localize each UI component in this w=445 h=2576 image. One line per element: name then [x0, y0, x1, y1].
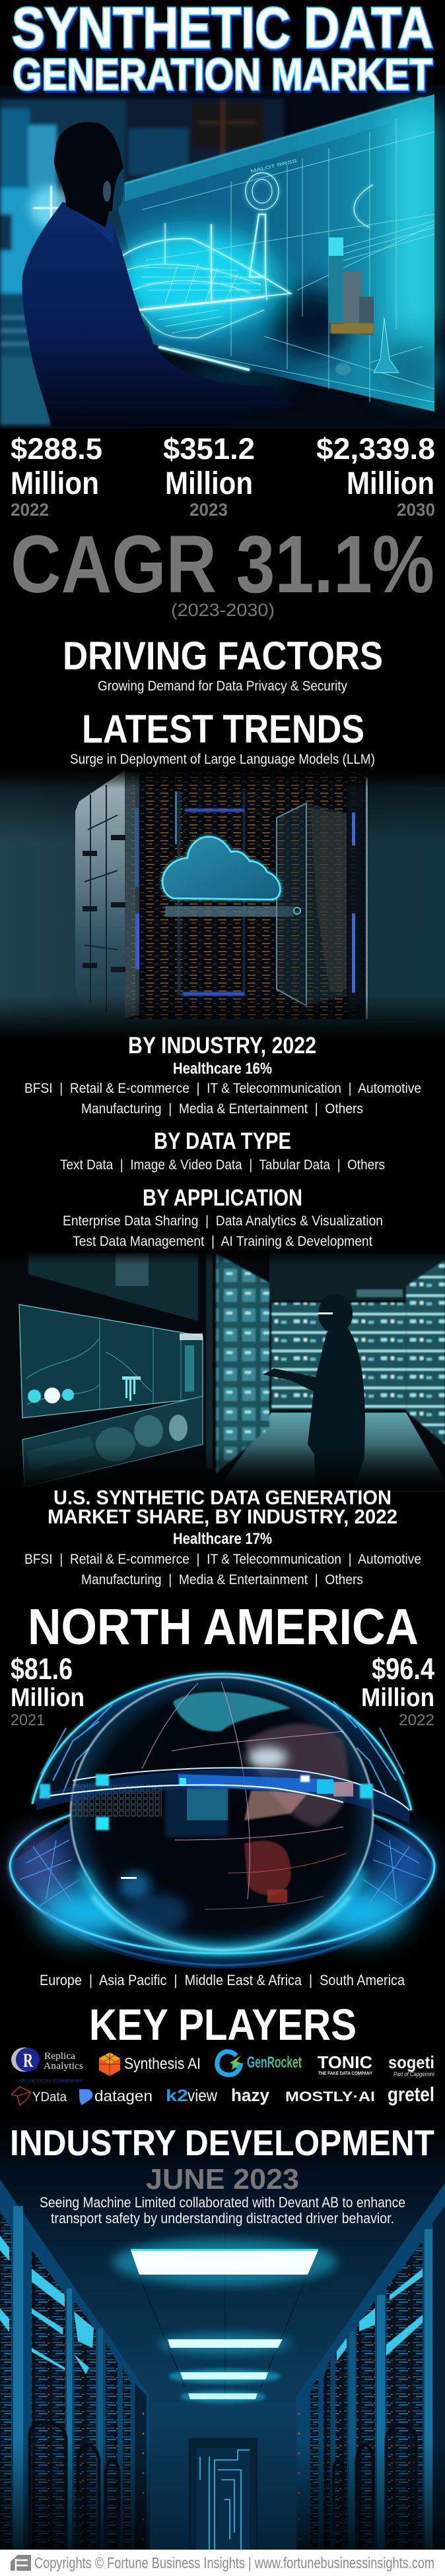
U.S. industry segments: Manufacturing | Media & Entertainment | Others [81, 1572, 363, 1587]
key players heading: KEY PLAYERS [89, 2000, 357, 2050]
logo: Replica Analytics: R [23, 2050, 33, 2071]
stat north america 2021: Million [11, 1684, 85, 1712]
logo: GenRocket: GenRocket [247, 2054, 302, 2071]
CAGR period: (2023-2030) [171, 600, 275, 620]
industry segments [24, 1081, 421, 1117]
globe sphere [71, 1677, 373, 1950]
stat 2030: $2,339.8 [316, 432, 435, 466]
stat 2030: Million [347, 466, 434, 501]
development description: Seeing Machine Limited collaborated with Devant AB to enhance [40, 2194, 405, 2211]
city towers [329, 237, 399, 375]
bottom fade [0, 1444, 445, 1490]
stat 2022: 2022 [11, 500, 49, 520]
panel: data centre corridor image [0, 2114, 445, 2550]
top fade [0, 1250, 445, 1264]
main data screen [19, 1304, 203, 1418]
meridians [142, 1682, 347, 1909]
panel: hero image [0, 86, 445, 429]
wireframe detail [142, 264, 261, 333]
footer [0, 2550, 445, 2576]
stat 2023: $351.2 [163, 432, 255, 466]
by data type heading: BY DATA TYPE [154, 1128, 291, 1154]
panel: market size stats [11, 432, 435, 520]
person silhouette [263, 1294, 365, 1492]
stat north america 2021: 2021 [11, 1711, 45, 1729]
right screen wall [406, 1260, 445, 1444]
U.S. market share heading: MARKET SHARE, BY INDUSTRY, 2022 [48, 1505, 397, 1528]
room divider [206, 1251, 213, 1469]
U.S. market share heading [48, 1486, 397, 1528]
icon: cloud [162, 837, 280, 900]
by industry heading: BY INDUSTRY, 2022 [128, 1033, 316, 1058]
panel: server cabinet image [0, 769, 445, 1039]
development description [40, 2194, 405, 2226]
stat 2022 [11, 432, 102, 520]
left server racks [0, 2180, 149, 2550]
lower bowl [10, 1815, 434, 1969]
logo: k2view: k2 [166, 2087, 188, 2105]
stat 2023: 2023 [189, 500, 228, 520]
U.S. industry segments [24, 1552, 421, 1587]
logo: Sogeti: Part of Capgemini [394, 2071, 435, 2077]
icon: Fortune Business Insights logo [11, 2555, 31, 2571]
U.S. market share heading: U.S. SYNTHETIC DATA GENERATION [53, 1486, 392, 1509]
image fades [0, 769, 445, 1039]
light flare [30, 186, 72, 230]
stat north america 2021: $81.6 [11, 1652, 73, 1686]
background top shading [0, 770, 445, 843]
logo: k2view: view [188, 2087, 218, 2105]
screen label: MALOT RRSS [250, 159, 298, 174]
stat north america 2022: $96.4 [372, 1652, 434, 1686]
stat 2022: $288.5 [11, 432, 102, 466]
panel: globe image [10, 1674, 434, 1969]
right server racks [296, 2183, 445, 2550]
logo: Synthesis AI: Synthesis AI [124, 2055, 201, 2073]
logo: Tonic: TONIC [318, 2052, 372, 2072]
screen bars [116, 1253, 149, 1286]
stat 2023: Million [165, 466, 253, 501]
logo: Synthesis AI [99, 2052, 201, 2076]
ceiling seams [40, 2170, 409, 2401]
logo: Replica Analytics: Analytics [44, 2061, 83, 2071]
background data wall [0, 99, 284, 425]
person silhouette [22, 122, 295, 427]
stat 2030 [316, 432, 435, 520]
logo: Sogeti: sogeti [388, 2052, 434, 2072]
industry segments: Manufacturing | Media & Entertainment | Others [81, 1101, 363, 1117]
center screen wall [216, 1253, 269, 1474]
application segments: Test Data Management | AI Training & Development [73, 1234, 372, 1249]
logo: Replica Analytics [11, 2047, 84, 2083]
back wall [150, 2402, 296, 2550]
lower data screen [22, 1396, 203, 1487]
application segments: Enterprise Data Sharing | Data Analytics & Visualization [63, 1213, 383, 1229]
stat north america 2021 [11, 1652, 85, 1729]
title [12, 0, 433, 100]
ceiling lights [112, 2238, 337, 2403]
U.S. healthcare share: Healthcare 17% [173, 1530, 272, 1548]
data type segments: Text Data | Image & Video Data | Tabular Data | Others [60, 1157, 385, 1173]
logo: GenRocket [217, 2052, 302, 2075]
by application heading: BY APPLICATION [143, 1185, 302, 1211]
floor [216, 1413, 445, 1492]
cables and rack shadow [0, 2422, 445, 2550]
latest trends text: Surge in Deployment of Large Language Models (LLM) [70, 752, 375, 767]
stat 2023 [163, 432, 255, 520]
far corridor wall [269, 1253, 445, 1409]
stat 2030: 2030 [397, 500, 435, 520]
left door [75, 770, 125, 1019]
logo: datagen: datagen [94, 2087, 153, 2104]
rack status lights [143, 2413, 300, 2540]
upper data screen [28, 1253, 198, 1321]
stat 2022: Million [11, 466, 99, 501]
holographic panel [112, 94, 442, 412]
panel edge highlight [125, 98, 423, 183]
logo: k2view [166, 2087, 218, 2105]
back door [189, 2439, 257, 2550]
development description: transport safety by understanding distracted driver behavior. [51, 2210, 394, 2226]
screen grid lines [142, 119, 434, 402]
development date: JUNE 2023 [146, 2163, 299, 2195]
latest trends heading: LATEST TRENDS [82, 707, 364, 751]
upper dome [32, 1674, 411, 1810]
logo: gretel: gretel [388, 2083, 434, 2106]
driving factors heading: DRIVING FACTORS [63, 634, 383, 678]
top fade [0, 2130, 445, 2170]
logo: hazy: hazy [231, 2085, 269, 2105]
logo: YData: YData [32, 2090, 67, 2104]
logo: Tonic: THE FAKE DATA COMPANY [318, 2071, 372, 2076]
equator ring [36, 1768, 409, 1824]
stat north america 2022: Million [361, 1684, 434, 1712]
other regions: Europe | Asia Pacific | Middle East & Africa | South America [40, 1972, 405, 1988]
stat north america 2022 [361, 1652, 434, 1729]
logo: YData [11, 2087, 67, 2105]
driving factors text: Growing Demand for Data Privacy & Security [98, 679, 347, 694]
wireframe model [119, 173, 373, 370]
panel: key player logos [11, 2047, 435, 2106]
panel: data room image [0, 1250, 445, 1492]
logo: Replica Analytics: AN AETION COMPANY [18, 2079, 84, 2083]
logo: Mostly AI: MOSTLY·AI [285, 2089, 375, 2104]
healthcare share: Healthcare 16% [173, 1060, 272, 1078]
right door glass [277, 778, 368, 1019]
cabinet interior [125, 772, 368, 1019]
stat north america 2022: 2022 [399, 1711, 434, 1729]
continents [73, 1692, 348, 1931]
application segments [63, 1213, 383, 1249]
logo: Replica Analytics: Replica [44, 2051, 75, 2062]
